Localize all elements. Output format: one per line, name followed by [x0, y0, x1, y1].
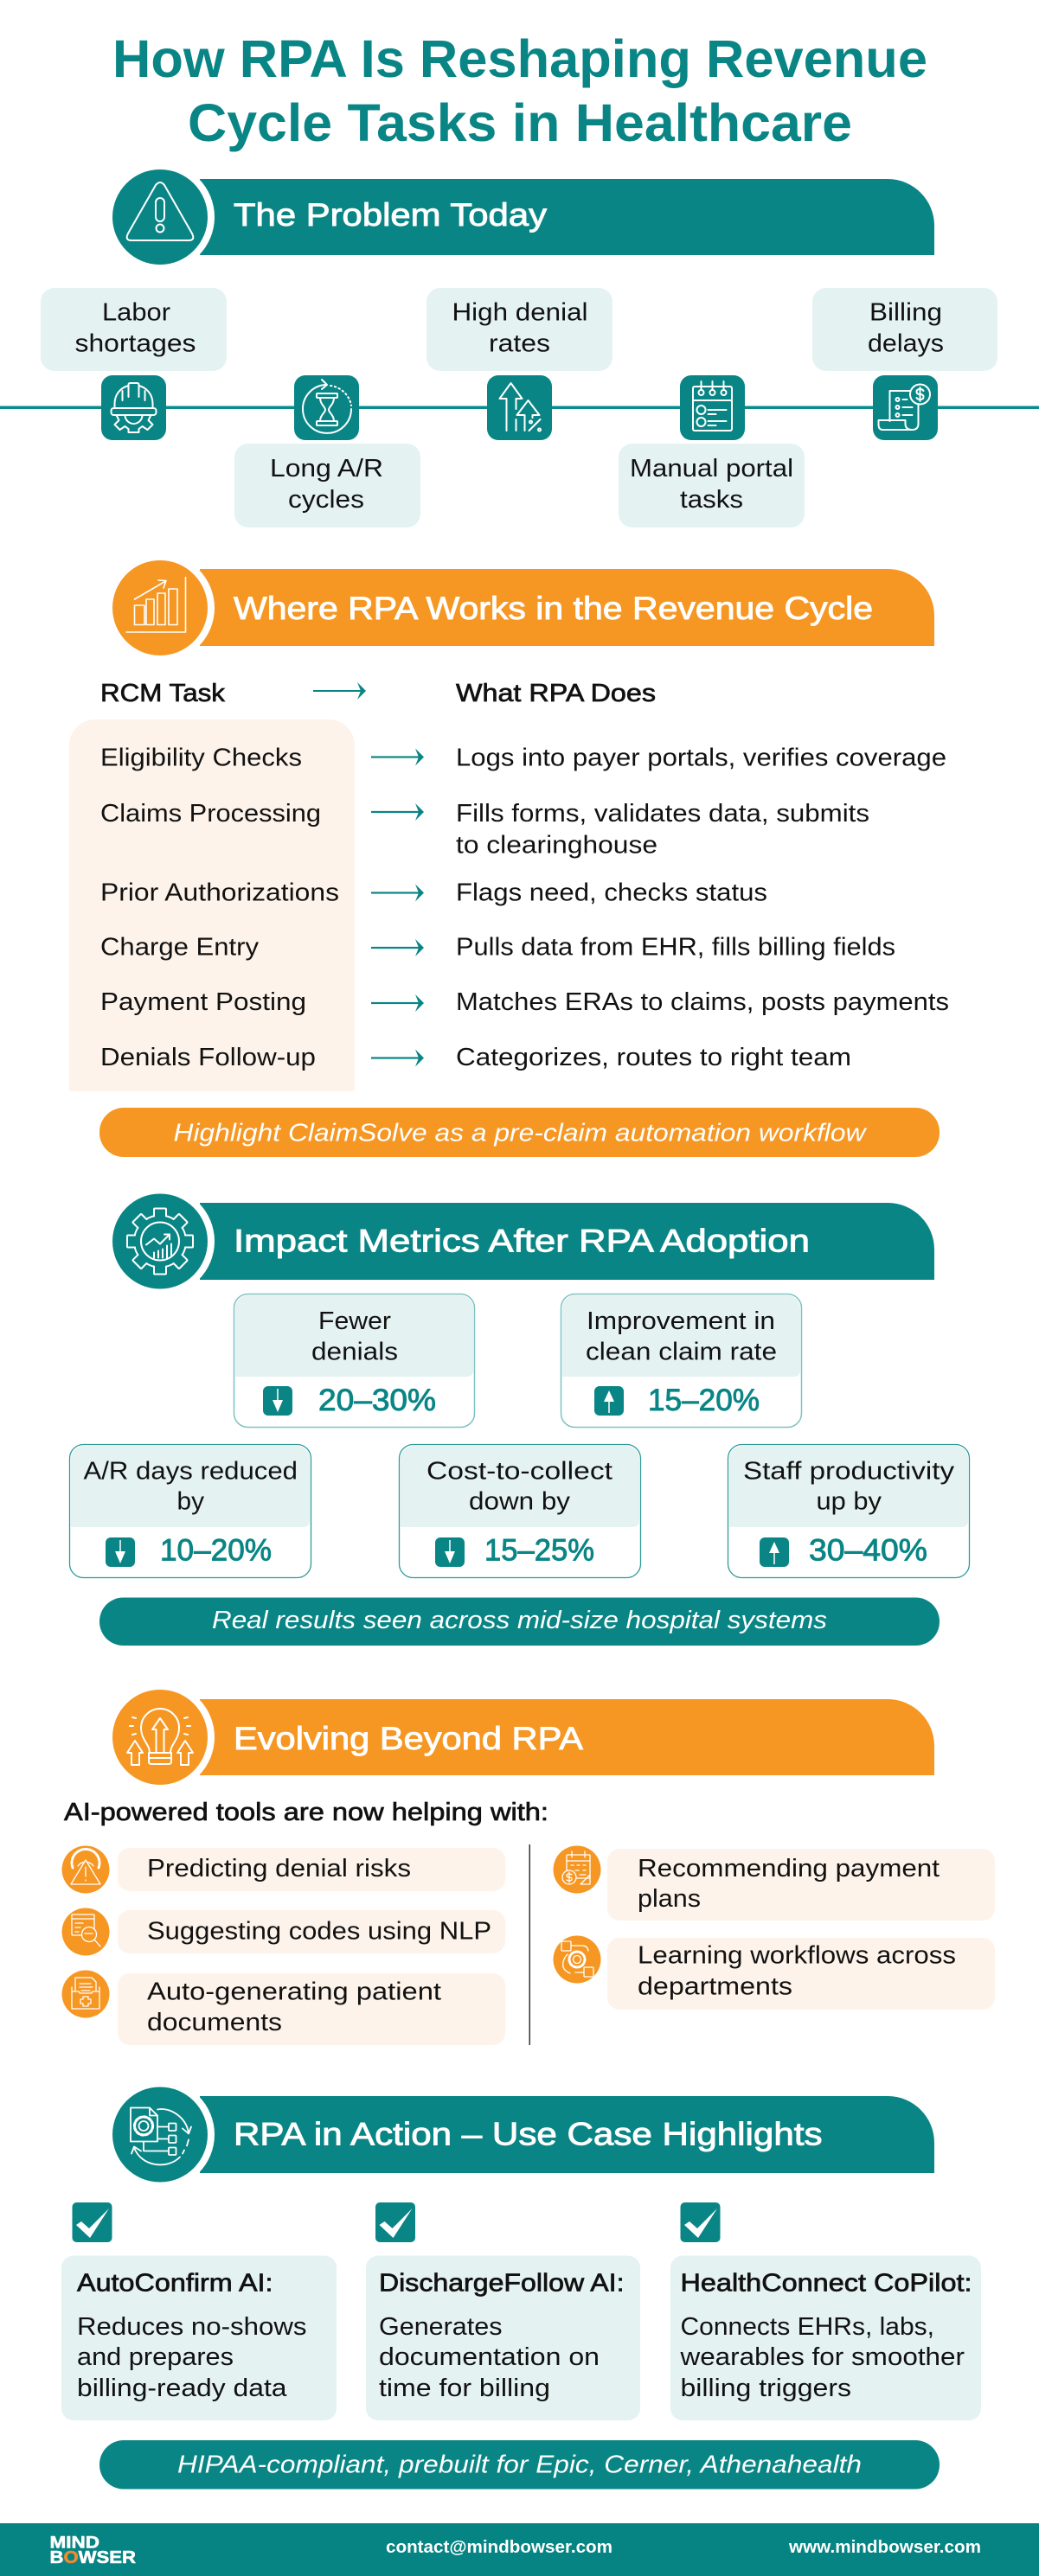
problem item: Billing delays [812, 288, 997, 440]
icon: checklist calendar [693, 381, 732, 431]
use case: HealthConnect CoPilot: wearables for smoother [679, 2343, 965, 2371]
problem item: Manual portal tasks: tasks [680, 486, 743, 514]
use case: DischargeFollow AI: time for billing [379, 2375, 550, 2402]
icon: check mark [680, 2202, 720, 2242]
use case: AutoConfirm AI: AutoConfirm AI: [77, 2269, 273, 2297]
AI item: Predicting denial risks [62, 1845, 505, 1894]
panel heading: The Problem Today: The Problem Today [234, 197, 548, 233]
use case: HealthConnect CoPilot: Connects EHRs, labs, [680, 2313, 934, 2341]
table column headers [100, 680, 656, 707]
text block: what RPA does [456, 744, 949, 1071]
icon: hourglass with cycle arrow [303, 380, 351, 433]
callout: real results: Real results seen across mid-size hospital systems [212, 1607, 827, 1634]
panel heading: Where RPA Works in the Revenue Cycle: Where RPA Works in the Revenue Cycle [234, 591, 873, 626]
AI item: Suggesting codes using NLP [62, 1908, 505, 1956]
callout: HIPAA-compliant: HIPAA-compliant, prebuilt for Epic, Cerner, Athenahealth [177, 2451, 862, 2478]
metric card: Staff productivity up by: Staff productivity [743, 1458, 955, 1486]
problem item: Labor shortages: shortages [74, 330, 196, 358]
timeline line [0, 406, 1039, 409]
metric card: Cost-to-collect down by [400, 1444, 640, 1577]
icon: up arrow [760, 1537, 789, 1567]
use case: DischargeFollow AI: DischargeFollow AI: [379, 2269, 625, 2297]
callout: real results [99, 1598, 940, 1646]
metric card: Improvement in clean claim rate: Improvement in [587, 1307, 775, 1335]
problem item: High denial rates [427, 288, 612, 440]
use case: DischargeFollow AI: Generates [379, 2313, 502, 2341]
problem item: Billing delays: Billing [869, 299, 942, 327]
problem item: High denial rates: rates [489, 330, 550, 358]
icon: down arrow [106, 1537, 135, 1567]
metric card: Improvement in clean claim rate: clean claim rate [586, 1339, 777, 1366]
metric card: Cost-to-collect down by: Cost-to-collect [427, 1458, 612, 1486]
problem item: Manual portal tasks: Manual portal [630, 455, 793, 483]
panel: RCM task list [69, 719, 355, 1091]
use case: DischargeFollow AI: documentation on [379, 2343, 600, 2371]
problem item: Labor shortages: Labor [102, 299, 170, 327]
metric card: A/R days reduced by: A/R days reduced [83, 1458, 298, 1486]
icon: gear workflow [561, 1941, 593, 1977]
icon: gear with trend chart [127, 1209, 193, 1275]
metric card: Improvement in clean claim rate: 15–20% [648, 1384, 760, 1417]
icon: code search [72, 1914, 100, 1946]
panel: RCM task list: Payment Posting [100, 988, 306, 1016]
problem item: Long A/R cycles: cycles [288, 486, 364, 514]
metric card: Cost-to-collect down by: 15–25% [484, 1534, 594, 1567]
panel heading: RPA in Action [106, 2081, 934, 2189]
panel: RCM task list: Eligibility Checks [100, 744, 302, 771]
problem item: Billing delays: delays [868, 330, 944, 358]
AI item: Predicting denial risks: Predicting denial risks [147, 1855, 411, 1882]
AI item: Auto-generating patient documents: Auto-generating patient [147, 1978, 441, 2006]
panel heading: Impact Metrics After RPA Adoption [106, 1186, 934, 1295]
metric card: Fewer denials: denials [311, 1339, 398, 1366]
metric card: Fewer denials: 20–30% [318, 1384, 436, 1417]
panel: RCM task list: Claims Processing [100, 800, 321, 828]
use case: AutoConfirm AI: billing-ready data [77, 2375, 287, 2402]
text block: what RPA does: to clearinghouse [456, 832, 657, 860]
text block: what RPA does: Pulls data from EHR, fills billing fields [456, 934, 895, 962]
panel heading: Impact Metrics After RPA Adoption: Impact Metrics After RPA Adoption [234, 1223, 810, 1259]
use case: AutoConfirm AI: and prepares [77, 2343, 234, 2371]
column divider [529, 1844, 530, 2045]
text block: what RPA does: Logs into payer portals, verifies coverage [456, 744, 946, 771]
callout: ClaimSolve [99, 1108, 940, 1157]
panel: RCM task list: Charge Entry [100, 934, 260, 962]
use case: AutoConfirm AI [61, 2202, 337, 2420]
icon: document workflow [131, 2108, 191, 2164]
footer: contact@mindbowser.com [386, 2538, 612, 2557]
logo: Mindbowser: MIND [50, 2534, 99, 2553]
title: How RPA Is Reshaping Revenue [112, 29, 927, 88]
AI item: Recommending payment plans: Recommending payment [638, 1855, 940, 1882]
panel heading: Evolving Beyond RPA: Evolving Beyond RPA [234, 1721, 583, 1756]
callout: HIPAA-compliant [99, 2440, 940, 2489]
panel heading: Evolving Beyond RPA [106, 1683, 934, 1792]
panel heading: Where RPA Works in the Revenue Cycle [106, 553, 934, 662]
footer [0, 2523, 1039, 2576]
text block: AI-powered intro: AI-powered tools are now helping with: [64, 1799, 548, 1826]
icon: gear warning [71, 1849, 100, 1884]
icon: growth chart [126, 578, 185, 632]
panel heading: RPA in Action: RPA in Action – Use Case Highlights [234, 2117, 822, 2151]
use case: HealthConnect CoPilot [670, 2202, 981, 2420]
problem item: High denial rates: High denial [452, 299, 588, 327]
AI item: Auto-generating patient documents: documents [147, 2009, 282, 2036]
icon: light bulb with arrows [127, 1709, 193, 1765]
AI item: Auto-generating patient documents [62, 1970, 505, 2045]
title [112, 29, 927, 152]
text block: what RPA does: Flags need, checks status [456, 879, 767, 906]
problem item: Manual portal tasks [619, 375, 805, 527]
use case: HealthConnect CoPilot: billing triggers [680, 2375, 851, 2402]
metric card: A/R days reduced by: by [176, 1487, 205, 1515]
icon: check mark [375, 2202, 415, 2242]
panel heading: The Problem Today [106, 163, 934, 272]
panel: RCM task list: Prior Authorizations [100, 879, 339, 906]
metric card: Fewer denials [234, 1294, 474, 1427]
icon: down arrow [263, 1386, 292, 1416]
icon: payment calendar [562, 1851, 590, 1884]
use case: HealthConnect CoPilot: HealthConnect CoPilot: [680, 2269, 972, 2297]
title: Cycle Tasks in Healthcare [188, 93, 852, 152]
arrow [313, 682, 366, 700]
AI item: Learning workflows across departments: Learning workflows across [638, 1942, 956, 1970]
use case: AutoConfirm AI: Reduces no-shows [77, 2313, 306, 2341]
logo: Mindbowser: BOWSER [50, 2548, 137, 2567]
AI item: Recommending payment plans [554, 1845, 995, 1921]
metric card: Staff productivity up by: 30–40% [809, 1534, 927, 1567]
metric card: Staff productivity up by [728, 1444, 969, 1577]
icon: hard hat with gear [111, 383, 156, 432]
icon: rising arrows with percent [500, 383, 541, 431]
table column headers: RCM Task [100, 680, 226, 707]
footer: www.mindbowser.com [788, 2538, 981, 2557]
problem item: Long A/R cycles [234, 375, 420, 527]
table column headers: What RPA Does [456, 680, 656, 707]
metric card: Cost-to-collect down by: down by [469, 1487, 571, 1515]
metric card: Fewer denials: Fewer [318, 1307, 391, 1335]
problem item: Labor shortages [41, 288, 227, 440]
text block: what RPA does: Matches ERAs to claims, posts payments [456, 988, 949, 1016]
metric card: A/R days reduced by [69, 1444, 311, 1577]
use case: DischargeFollow AI [366, 2202, 640, 2420]
icon: check mark [73, 2202, 112, 2242]
arrows: task to action [371, 749, 424, 1067]
icon: medical folder [72, 1978, 99, 2009]
icon: up arrow [594, 1386, 624, 1416]
logo: Mindbowser [50, 2534, 137, 2567]
metric card: A/R days reduced by: 10–20% [160, 1534, 272, 1567]
icon: warning triangle [127, 182, 193, 240]
text block: what RPA does: Categorizes, routes to right team [456, 1044, 851, 1071]
panel: RCM task list: Denials Follow-up [100, 1044, 316, 1071]
AI item: Recommending payment plans: plans [638, 1885, 701, 1913]
AI item: Learning workflows across departments [554, 1935, 995, 2010]
AI item: Suggesting codes using NLP: Suggesting codes using NLP [147, 1918, 491, 1946]
icon: down arrow [435, 1537, 465, 1567]
icon: invoice with dollar [879, 384, 930, 430]
AI item: Learning workflows across departments: departments [638, 1973, 792, 2001]
metric card: Improvement in clean claim rate [561, 1294, 801, 1427]
problem item: Long A/R cycles: Long A/R [270, 455, 383, 483]
text block: what RPA does: Fills forms, validates data, submits [456, 800, 869, 828]
metric card: Staff productivity up by: up by [817, 1487, 882, 1515]
callout: ClaimSolve: Highlight ClaimSolve as a pre-claim automation workflow [173, 1119, 868, 1147]
